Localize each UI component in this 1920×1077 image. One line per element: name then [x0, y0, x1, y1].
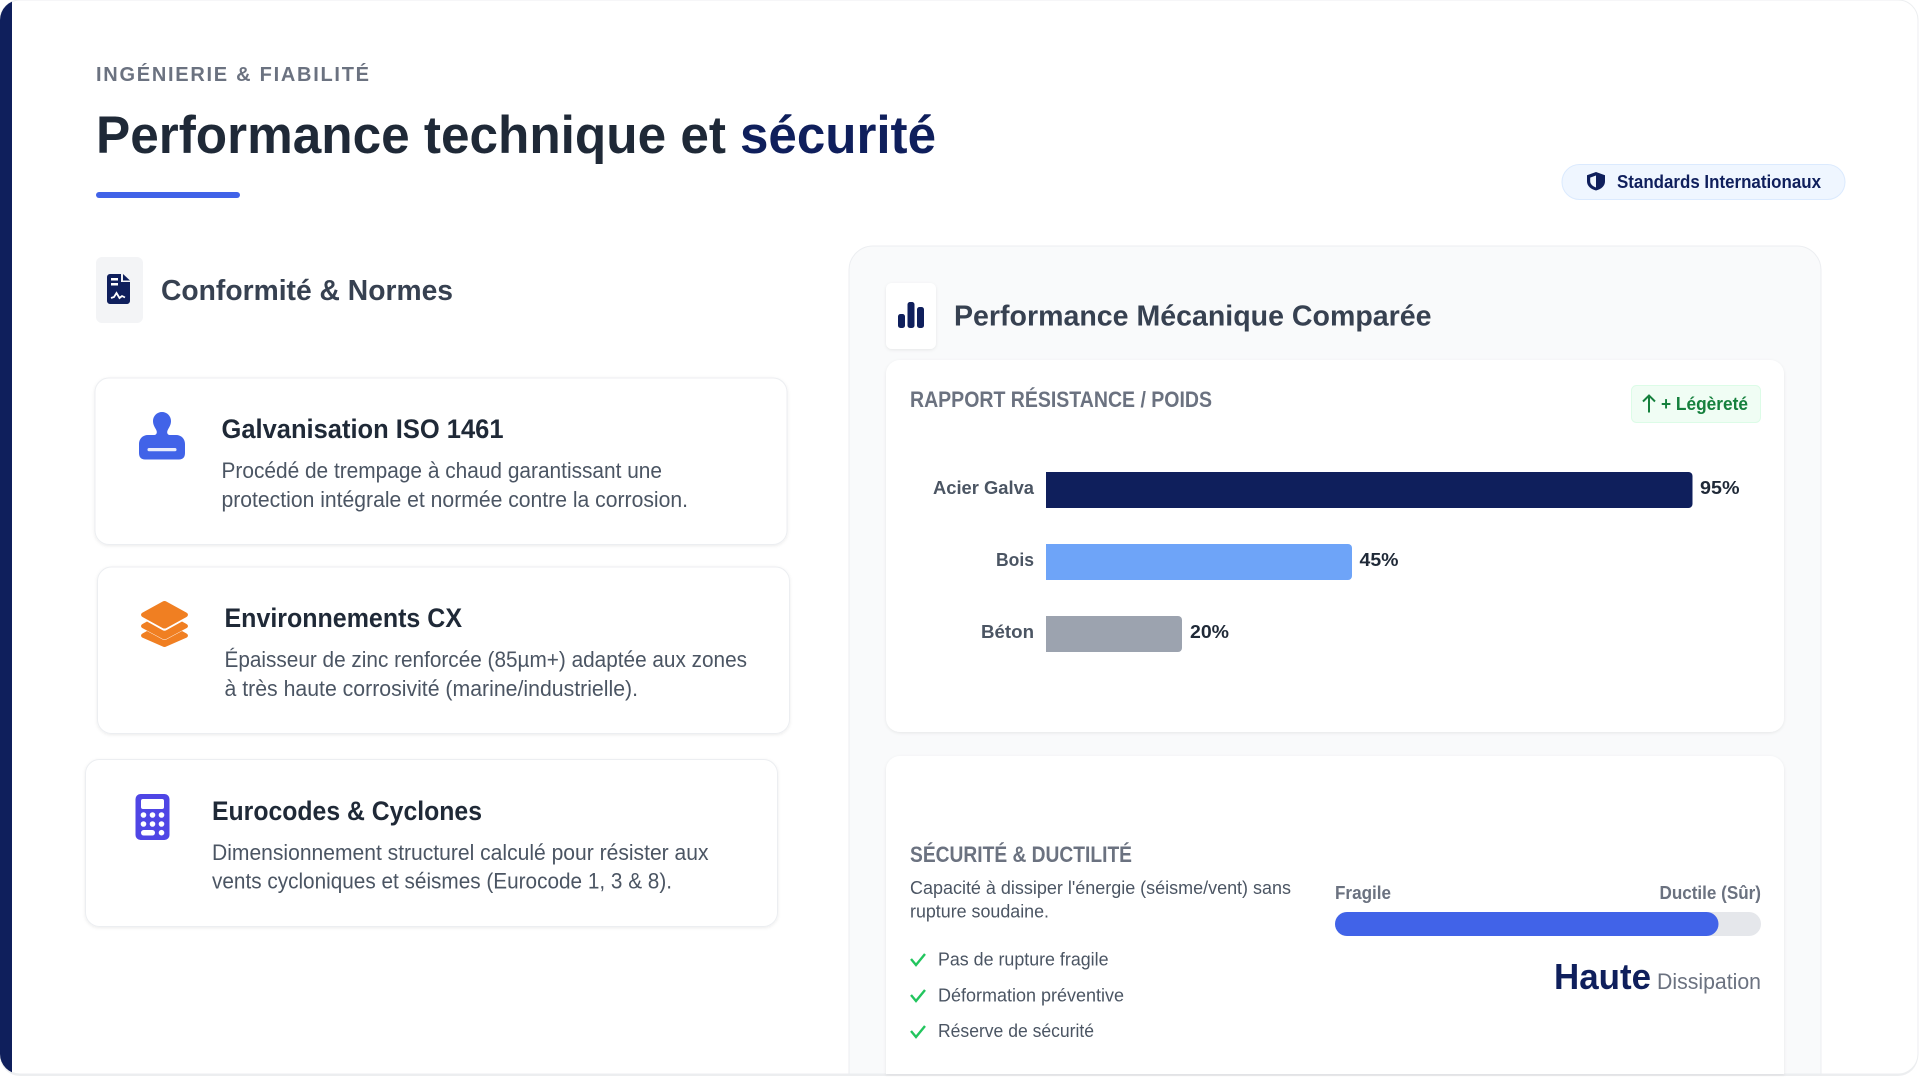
bar: acier galva: 95%	[1700, 478, 1740, 498]
section header: conformité	[96, 257, 453, 323]
card: environnements CX: à très haute corrosivité (marine/industrielle).	[224, 676, 638, 701]
title underline	[96, 192, 240, 198]
card: galvanisation: protection intégrale et normée contre la corrosion.	[222, 487, 688, 512]
bar: béton	[981, 616, 1229, 652]
bar: bois: 45%	[1360, 550, 1398, 570]
card: galvanisation: Galvanisation ISO 1461	[222, 414, 504, 444]
icon: file contract	[107, 274, 130, 304]
title: Performance technique et	[96, 106, 726, 165]
ductility gauge: Fragile	[1335, 883, 1391, 903]
icon: stamp	[139, 412, 185, 460]
card: eurocodes: Dimensionnement structurel calculé pour résister aux	[212, 840, 708, 865]
card: sécurité et ductilité: Capacité à dissiper l'énergie (séisme/vent) sans	[910, 878, 1291, 898]
card: eurocodes	[86, 760, 778, 926]
ductility gauge	[1335, 883, 1761, 997]
icon: shield	[1587, 172, 1605, 190]
panel: conformité et normes	[86, 257, 790, 926]
card: rapport résistance poids: RAPPORT RÉSISTANCE / POIDS	[910, 387, 1212, 412]
bar: béton: Béton	[981, 622, 1034, 642]
icon: bar chart	[898, 302, 924, 328]
icon: layers	[141, 601, 188, 647]
icon: calculator	[136, 794, 170, 840]
title: sécurité	[740, 106, 936, 165]
ductility gauge: Ductile (Sûr)	[1660, 883, 1761, 903]
section header: performance: Performance Mécanique Comparée	[954, 300, 1432, 332]
tag: légèreté: + Légèreté	[1661, 394, 1748, 414]
card: environnements CX: Épaisseur de zinc renforcée (85µm+) adaptée aux zones	[224, 647, 747, 672]
bar: béton: 20%	[1190, 622, 1229, 642]
icon: up arrow	[1643, 396, 1655, 412]
card: eurocodes: Eurocodes & Cyclones	[212, 796, 482, 826]
left accent bar	[0, 0, 12, 1074]
ductility gauge: Dissipation	[1657, 969, 1761, 994]
bar: bois: Bois	[996, 550, 1034, 570]
badge: standards internationaux	[1562, 164, 1845, 200]
bar: acier galva	[933, 472, 1740, 508]
ductility gauge: Haute	[1554, 956, 1651, 997]
card: sécurité et ductilité	[886, 756, 1784, 1074]
check item 1: Pas de rupture fragile	[938, 950, 1108, 970]
card: environnements CX	[98, 567, 790, 734]
badge: standards internationaux: Standards Internationaux	[1617, 172, 1821, 192]
section header: conformité: Conformité & Normes	[161, 275, 453, 307]
card: rapport résistance poids	[886, 360, 1784, 732]
card: sécurité et ductilité: rupture soudaine.	[910, 902, 1049, 922]
check item 2: Déformation préventive	[938, 986, 1124, 1006]
bar: acier galva: Acier Galva	[933, 478, 1035, 498]
bar: bois	[996, 544, 1398, 580]
card: eurocodes: vents cycloniques et séismes (Eurocode 1, 3 & 8).	[212, 868, 672, 894]
checklist	[911, 950, 1124, 1041]
card: galvanisation: Procédé de trempage à chaud garantissant une	[222, 458, 662, 483]
card: sécurité et ductilité: SÉCURITÉ & DUCTILITÉ	[910, 842, 1132, 867]
card: galvanisation	[95, 378, 787, 544]
panel: performance mécanique	[849, 246, 1821, 1074]
check item 3: Réserve de sécurité	[938, 1021, 1094, 1041]
card: environnements CX: Environnements CX	[224, 603, 462, 633]
bar chart	[933, 472, 1740, 652]
overline: INGÉNIERIE & FIABILITÉ	[96, 63, 369, 86]
tag: légèreté	[1632, 386, 1760, 422]
section header: performance	[886, 283, 1432, 349]
